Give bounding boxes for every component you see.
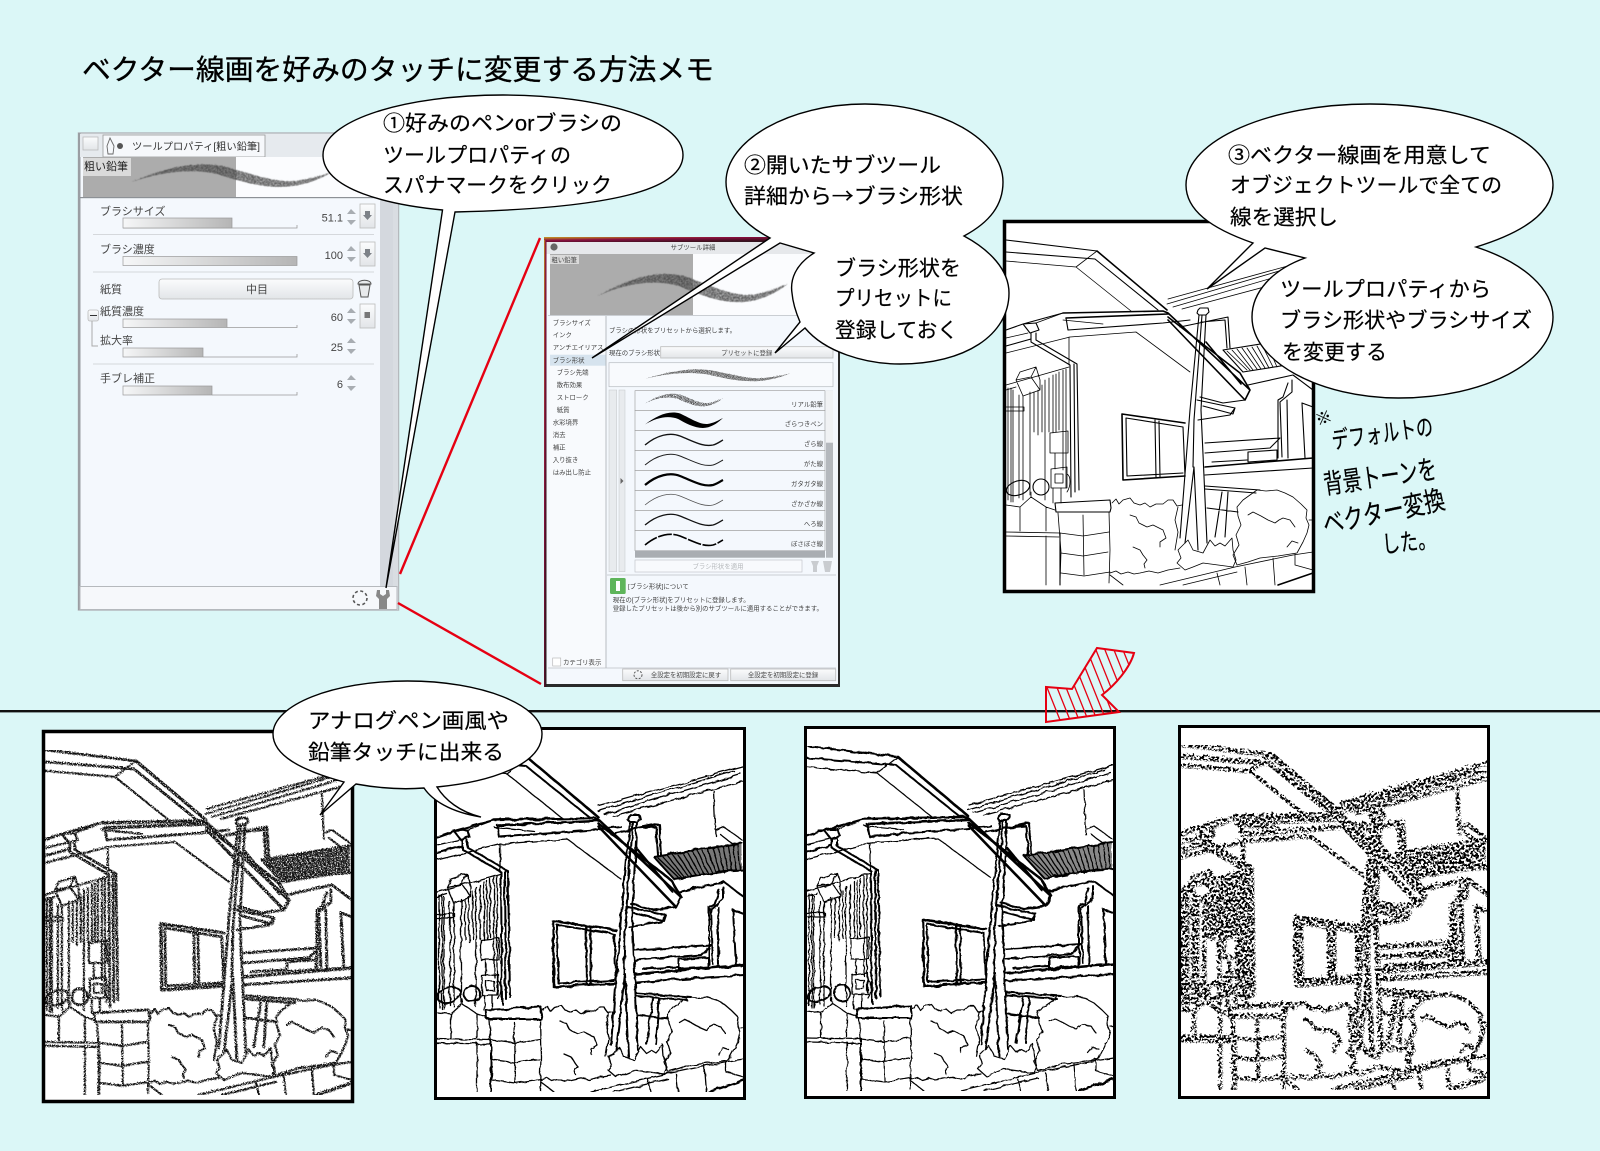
brush preset list: ざら線 xyxy=(804,439,824,448)
category list: 補正 xyxy=(553,442,566,452)
slider: brush density xyxy=(100,242,375,266)
handwritten note: 背景トーンを xyxy=(1321,447,1439,502)
slider: paper density: 紙質濃度 xyxy=(100,304,144,318)
handwritten note: ベクター変換 xyxy=(1319,478,1448,542)
slider: brush density: ブラシ濃度 xyxy=(100,242,155,256)
panel: tool property window xyxy=(78,133,398,610)
bubble 3: select lines and change brush: オブジェクトツールで全ての xyxy=(1230,174,1502,198)
brush preset list: へろ線 xyxy=(804,519,824,528)
bubble 2: open brush shape: 登録しておく xyxy=(835,320,958,342)
paper texture row: 紙質 xyxy=(100,282,122,296)
slider: brush size: 51.1 xyxy=(322,212,343,224)
bubble 2: open brush shape: 詳細から→ブラシ形状 xyxy=(744,180,963,210)
icon: reset gear xyxy=(353,591,367,605)
brush preset list: ざかざか線 xyxy=(791,499,824,508)
bubble 1: click wrench: ①好みのペンorブラシの xyxy=(383,112,622,136)
category list: 入り抜き xyxy=(553,455,578,464)
category list xyxy=(550,316,606,668)
brush preview large: 粗い鉛筆 xyxy=(552,255,578,264)
description and preset row xyxy=(609,326,833,387)
category list: アンチエイリアス xyxy=(553,344,604,352)
category list: カテゴリ表示 xyxy=(563,658,602,666)
bottom buttons xyxy=(623,669,836,681)
slider: stabilizer: 6 xyxy=(337,379,343,391)
bubble 1: click wrench: ツールプロパティの xyxy=(383,144,571,168)
slider: scale xyxy=(100,333,356,357)
category list: 消去 xyxy=(553,430,566,439)
bubble 2: open brush shape: プリセットに xyxy=(835,288,952,310)
slider: stabilizer: 手ブレ補正 xyxy=(100,371,155,385)
category list: ブラシ先端 xyxy=(557,368,589,376)
brush preset list: ガタガタ線 xyxy=(791,479,824,488)
icon: wrench xyxy=(376,590,390,609)
slider: scale: 拡大率 xyxy=(100,333,133,347)
bubble 3: select lines and change brush: 線を選択し xyxy=(1230,206,1338,230)
category list: ブラシ形状 xyxy=(553,356,585,364)
bubble 3: select lines and change brush: ③ベクター線画を用意して xyxy=(1228,144,1491,168)
category list: ストローク xyxy=(557,394,589,402)
title: ベクター線画を好みのタッチに変更する方法メモ xyxy=(82,54,714,86)
bubble 4: analog pen touch: アナログペン画風や xyxy=(308,710,509,733)
panel: sub tool detail window xyxy=(544,237,840,687)
bubble 1: click wrench xyxy=(323,95,683,588)
bubble 4: analog pen touch xyxy=(273,681,542,817)
bubble 4: analog pen touch: 鉛筆タッチに出来る xyxy=(308,742,504,764)
category list: 散布効果 xyxy=(557,380,583,389)
title bar: サブツール詳細 xyxy=(671,242,715,252)
panel: rough pen result xyxy=(434,727,746,1100)
bubble 3: select lines and change brush: ブラシ形状やブラシサイズ xyxy=(1280,310,1532,332)
bubble 3: select lines and change brush: を変更する xyxy=(1282,342,1387,364)
bubble 2: open brush shape: ブラシ形状を xyxy=(835,258,961,280)
panel: scattered dots result xyxy=(1178,725,1490,1099)
paper texture row: 中目 xyxy=(246,283,268,296)
brush preview xyxy=(83,157,380,198)
slider: paper density xyxy=(88,304,375,346)
brush preview large xyxy=(550,254,835,315)
bubble 2: open brush shape xyxy=(592,104,1009,364)
paper texture row xyxy=(100,279,371,299)
tab: tool property: ツールプロパティ[粗い鉛筆] xyxy=(132,140,260,153)
red connector lines xyxy=(398,238,541,684)
category list: インク xyxy=(553,331,572,339)
panel: original vector line art xyxy=(1004,222,1314,592)
handwritten note: した。 xyxy=(1380,520,1437,560)
handwritten note: デフォルトの xyxy=(1329,407,1435,456)
brush preset list: ブラシ形状を適用 xyxy=(692,562,744,570)
bottom buttons: 全設定を初期設定に戻す xyxy=(651,670,721,679)
slider: paper density: 60 xyxy=(331,312,343,324)
panel: pencil touch result xyxy=(42,730,354,1103)
info section: [ブラシ形状]について xyxy=(628,582,689,590)
info section: 登録したプリセットは後から別のサブツールに適用することができます。 xyxy=(613,604,823,613)
handwritten note xyxy=(1312,403,1448,560)
info section: 現在の[ブラシ形状]をプリセットに登録します。 xyxy=(613,595,750,604)
brush preview: 粗い鉛筆 xyxy=(84,159,128,173)
slider: scale: 25 xyxy=(331,342,343,354)
title bar xyxy=(546,242,838,254)
tab: tool property xyxy=(103,135,265,157)
category list: はみ出し防止 xyxy=(553,468,592,476)
slider: stabilizer xyxy=(100,371,356,395)
slider: brush size: ブラシサイズ xyxy=(100,204,165,218)
bubble 3: select lines and change brush: ツールプロパティから xyxy=(1280,278,1491,302)
panel: jagged pen result xyxy=(804,726,1116,1099)
brush preset list: ぼさぼさ線 xyxy=(791,539,824,548)
description and preset row: プリセットに登録 xyxy=(721,348,773,357)
info section xyxy=(610,578,823,613)
arrow: hatched red arrow xyxy=(1045,646,1136,724)
divider line between sections xyxy=(0,710,1600,712)
slider: brush size xyxy=(100,204,375,228)
description and preset row: 現在のブラシ形状 xyxy=(609,348,661,357)
handwritten note: ※ xyxy=(1312,403,1335,431)
brush preset list xyxy=(609,390,833,572)
category list: 紙質 xyxy=(557,405,570,414)
bubble 1: click wrench: スパナマークをクリック xyxy=(383,174,612,198)
bottom buttons: 全設定を初期設定に登録 xyxy=(748,670,819,679)
category list: 水彩境界 xyxy=(553,418,579,426)
category list: ブラシサイズ xyxy=(553,318,591,327)
bubble 2: open brush shape: ②開いたサブツール xyxy=(744,154,941,178)
slider: brush density: 100 xyxy=(325,250,343,262)
bubble 3: select lines and change brush xyxy=(1186,104,1553,398)
brush preset list: がた線 xyxy=(804,459,824,468)
brush preset list: ざらつきペン xyxy=(785,419,823,428)
brush preset list: リアル鉛筆 xyxy=(791,400,824,408)
description and preset row: ブラシの形状をプリセットから選択します。 xyxy=(609,326,736,334)
